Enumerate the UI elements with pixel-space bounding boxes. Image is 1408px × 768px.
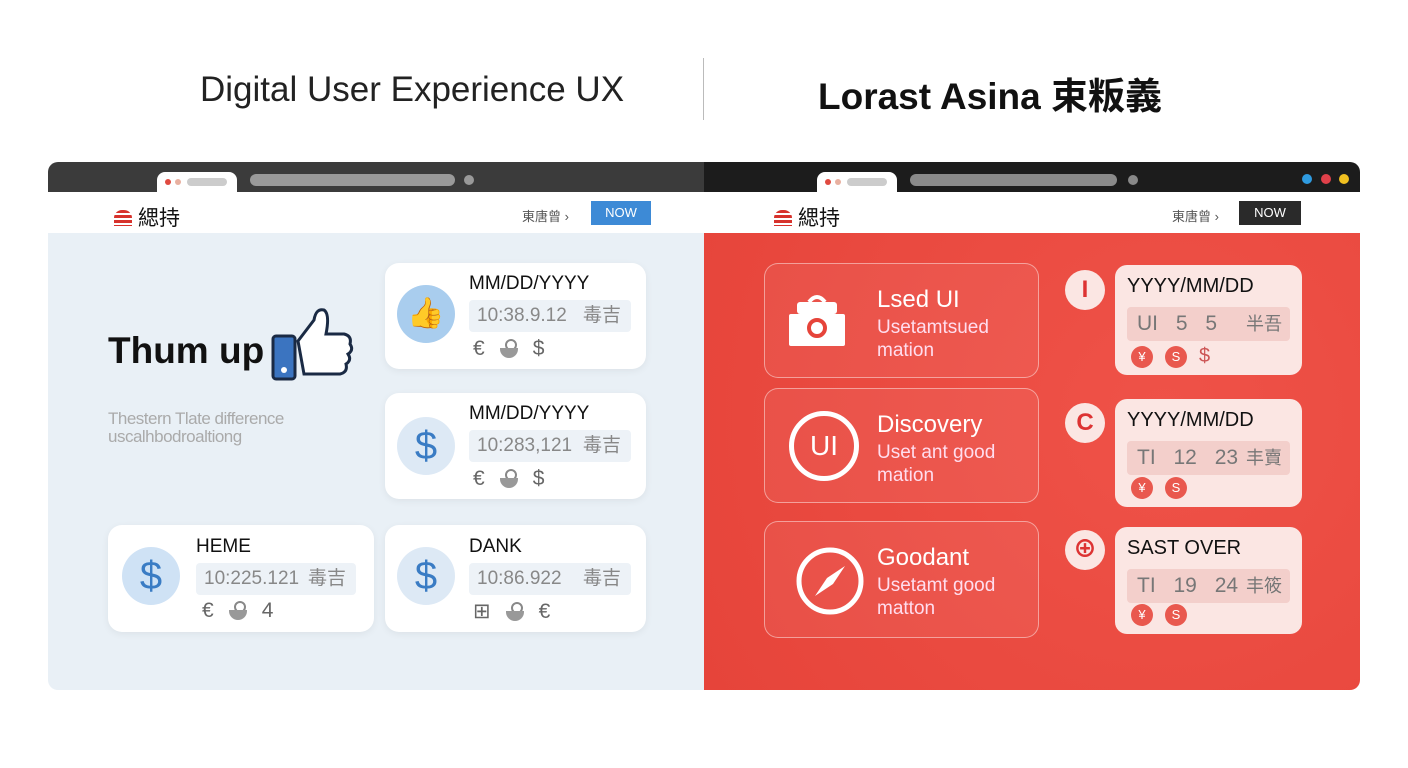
logo left: 緦持: [138, 207, 180, 230]
small card 2: C: [1076, 409, 1094, 436]
logo right: [774, 207, 840, 230]
card 3: 10:225.121: [204, 568, 299, 589]
icon: compass: [796, 548, 864, 614]
subtext: Thestern Tlate difference: [108, 409, 284, 428]
card 3: € 4: [202, 599, 273, 622]
text: TI 19 24: [1137, 574, 1238, 597]
title: right: Lorast Asina 束粄義: [818, 76, 1162, 117]
text: ¥: [1138, 607, 1146, 622]
card 3: HEME: [196, 536, 251, 557]
right card 3: Goodant: [877, 544, 969, 571]
text: S: [1172, 607, 1180, 622]
card 3: [108, 525, 374, 632]
card 1: MM/DD/YYYY: [469, 273, 589, 294]
card 4: 毒吉: [583, 568, 621, 589]
right card 2: mation: [877, 465, 934, 486]
card 1: € $: [473, 337, 544, 360]
divider: [703, 58, 704, 120]
card 4: $: [415, 554, 437, 598]
text: YYYY/MM/DD: [1127, 409, 1254, 431]
card 4: [385, 525, 646, 632]
card 3: $: [140, 554, 162, 598]
NOW button right: NOW: [1254, 205, 1286, 220]
right card 1: mation: [877, 340, 934, 361]
title: left: Digital User Experience UX: [200, 70, 624, 109]
text: ¥: [1138, 349, 1146, 364]
right card 3: [764, 521, 1039, 638]
left content bg: [48, 233, 704, 690]
right card 1: [764, 263, 1039, 378]
card 2: € $: [473, 467, 544, 490]
small card 1: [1065, 270, 1105, 310]
right card 2: [764, 388, 1039, 503]
card 4: DANK: [469, 536, 522, 557]
text: S: [1172, 349, 1180, 364]
text: TI 12 23: [1137, 446, 1238, 469]
top bar right: [704, 162, 1360, 192]
text: 丰賣: [1246, 448, 1282, 468]
address bar left: [250, 174, 455, 186]
right card 1: Usetamtsued: [877, 317, 989, 338]
icon: UI gear: UI: [810, 430, 838, 461]
subtext: [108, 409, 284, 446]
card 3: 毒吉: [308, 568, 346, 589]
text: 半吾: [1246, 314, 1282, 334]
small card 2: [1065, 403, 1105, 443]
icon: bag: [789, 295, 845, 346]
NOW button left: NOW: [605, 205, 637, 220]
card 4: ⊞ €: [473, 600, 550, 623]
text: $: [1199, 345, 1210, 367]
top bar left: [48, 162, 704, 192]
logo left: [114, 207, 180, 230]
right card 1: Lsed UI: [877, 286, 960, 313]
text: UI 5 5: [1137, 312, 1217, 335]
right card 2: Discovery: [877, 411, 982, 438]
text: S: [1172, 480, 1180, 495]
tab left: [157, 172, 237, 194]
text: YYYY/MM/DD: [1127, 275, 1254, 297]
window dots: [1302, 174, 1312, 184]
right card 3: Usetamt good: [877, 575, 995, 596]
logo right: 緦持: [798, 207, 840, 230]
icon: thumbs up: [272, 308, 354, 380]
headline: Thum up: Thum up: [108, 330, 264, 371]
card 1: [385, 263, 646, 369]
text: ¥: [1138, 480, 1146, 495]
right card 3: matton: [877, 598, 935, 619]
text: SAST OVER: [1127, 537, 1241, 559]
right card 2: Uset ant good: [877, 442, 995, 463]
card 2: $: [415, 424, 437, 468]
address bar right: [910, 174, 1117, 186]
card 2: MM/DD/YYYY: [469, 403, 589, 424]
small card 1: I: [1082, 276, 1088, 303]
small card 3: ⊕: [1073, 536, 1097, 563]
nav link right: 東唐曾 ›: [1172, 209, 1219, 224]
nav link left: 東唐曾 ›: [522, 209, 569, 224]
right content bg: [704, 233, 1360, 690]
card 1: 👍: [407, 297, 445, 330]
card 1: 10:38.9.12: [477, 305, 567, 326]
card 2: [385, 393, 646, 499]
browser frame: [48, 162, 1360, 690]
icon: UI gear: [789, 411, 859, 481]
NOW button right: [1239, 201, 1301, 225]
card 2: 10:283,121: [477, 435, 572, 456]
card 2: 毒吉: [583, 435, 621, 456]
small card 3: [1065, 530, 1105, 570]
NOW button left: [591, 201, 651, 225]
card 4: 10:86.922: [477, 568, 562, 589]
nav bar: [48, 192, 1360, 233]
subtext: uscalhbodroaltiong: [108, 427, 242, 446]
card 1: 毒吉: [583, 305, 621, 326]
tab right: [817, 172, 897, 194]
text: 丰筱: [1246, 576, 1282, 596]
